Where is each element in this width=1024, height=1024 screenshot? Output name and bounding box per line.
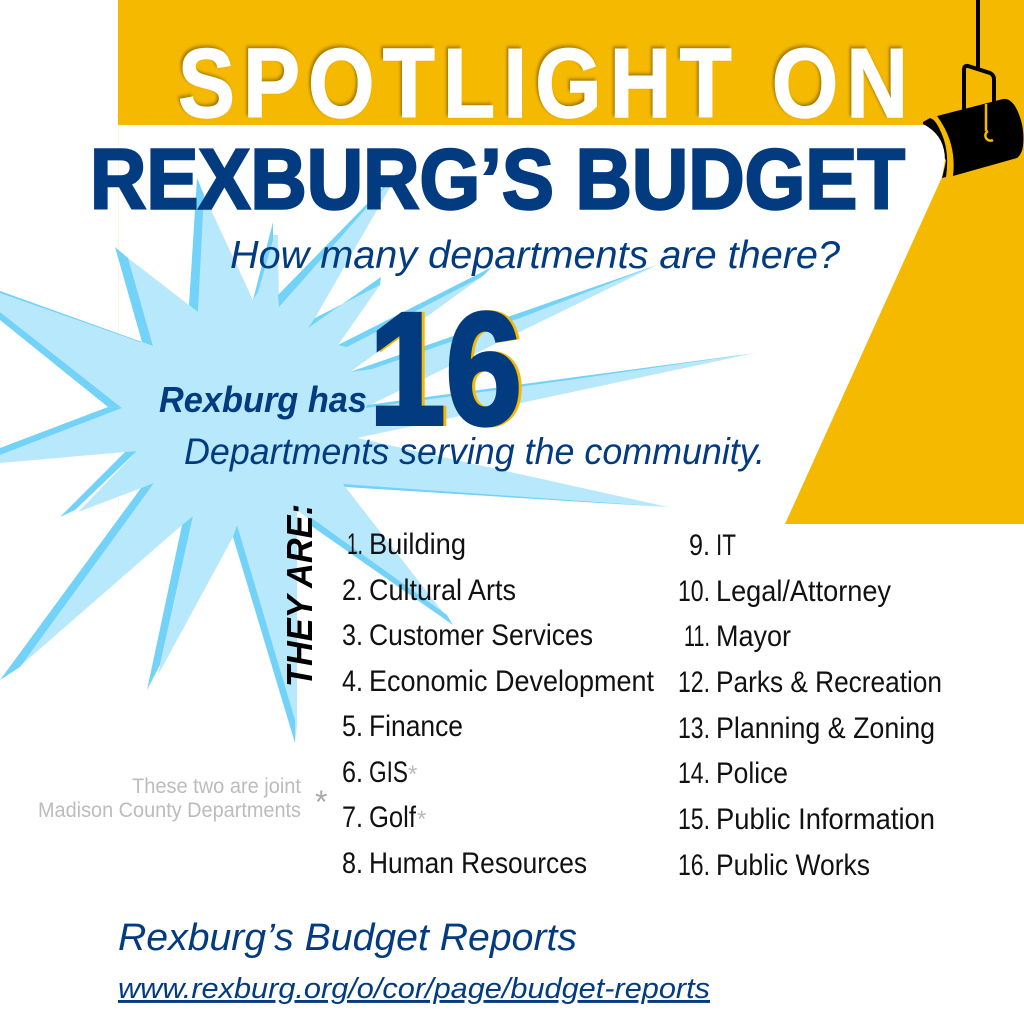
rotated label: they are: THEY ARE: [279,504,320,687]
item 6 [342,756,417,789]
item 14: 14. [678,757,710,790]
item 6: 6. [342,756,363,789]
footnote: joint departments: * [315,784,327,820]
item 6: GIS [369,756,408,789]
item 11 [684,620,791,653]
text: Rexburg has: Rexburg has [159,379,367,420]
question heading: How many departments are there? [230,234,840,277]
icon: stage spotlight [923,0,1023,178]
item 12: 12. [678,666,710,699]
item 1: 1. [347,528,363,561]
item 4: Economic Development [369,665,655,698]
item 7: Golf [369,801,417,834]
item 7: 7. [342,801,363,834]
item 10: Legal/Attorney [716,575,891,608]
item 14 [678,757,788,790]
item 3: 3. [342,619,363,652]
lamp front rim [923,118,947,178]
item 8: Human Resources [369,847,587,880]
big number 16: 16 [369,279,522,458]
title: spotlight on: SPOTLIGHT ON [178,30,908,138]
item 9: IT [716,529,736,562]
department list: column one [342,528,655,880]
item 1: Building [369,528,466,561]
lamp bracket [964,66,994,110]
lamp pivot [985,104,993,141]
starburst [0,170,755,743]
title: Rexburg's budget: REXBURG’S BUDGET [90,132,905,228]
item 10: 10. [678,575,710,608]
department list: column two [678,529,942,882]
item 15: Public Information [716,803,935,836]
item 2: 2. [342,574,363,607]
item 13: 13. [678,712,710,745]
footer heading: Rexburg’s Budget Reports [118,917,577,959]
item 7 [342,801,426,834]
hanging rope [976,0,980,68]
item 7: * [417,806,426,833]
item 5: Finance [369,710,463,743]
item 11: Mayor [716,620,791,653]
item 11: 11. [684,620,710,653]
item 4: 4. [342,665,363,698]
item 13: Planning & Zoning [716,712,935,745]
footer link: www.rexburg.org/o/cor/page/budget-reports [118,973,710,1005]
item 3: Customer Services [369,619,593,652]
item 16: 16. [678,849,710,882]
item 12: Parks & Recreation [716,666,942,699]
item 15: 15. [678,803,710,836]
item 5: 5. [342,710,363,743]
footnote: joint departments [38,775,327,822]
item 14: Police [716,757,788,790]
item 2: Cultural Arts [369,574,516,607]
item 8: 8. [342,847,363,880]
text: departments serving: Departments serving the community. [184,431,765,472]
lamp yellow ring [934,117,950,176]
footnote: joint departments: These two are joint [132,775,301,798]
item 9 [689,529,736,562]
lamp body [937,99,1023,176]
item 16: Public Works [716,849,870,882]
item 9: 9. [689,529,710,562]
footnote: joint departments: Madison County Departments [38,799,301,822]
item 6: * [408,761,417,788]
